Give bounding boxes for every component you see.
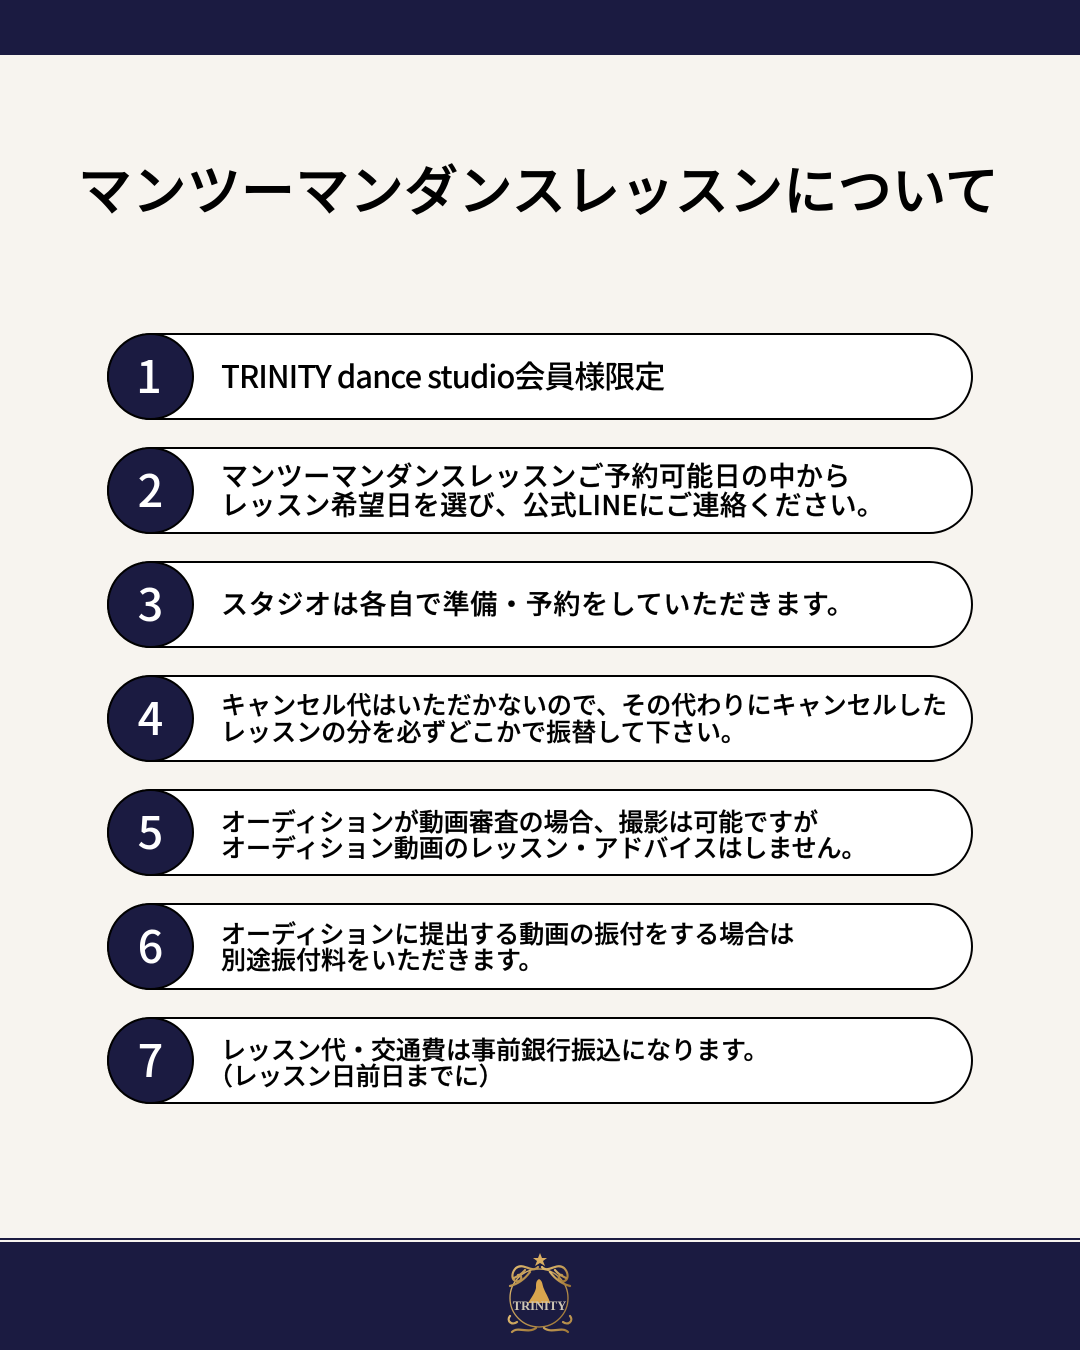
text 6 (221, 915, 794, 977)
item 6 (107, 903, 973, 990)
text 2: マンツーマンダンスレッスンご予約可能日の中から (221, 455, 851, 494)
text 7 (208, 1031, 769, 1093)
number 4 (107, 675, 194, 762)
item 2 (107, 447, 973, 534)
number 5: 5 (138, 797, 163, 862)
text 3: スタジオは各自で準備・予約をしていただきます。 (221, 583, 855, 622)
number 2 (107, 447, 194, 534)
text 6: オーディションに提出する動画の振付をする場合は (221, 915, 794, 951)
text 2 (221, 455, 884, 523)
logo (508, 1253, 572, 1334)
title: マンツーマンダンスレッスンについて (78, 147, 999, 226)
number 3 (107, 561, 194, 648)
text 4: キャンセル代はいただかないので、その代わりにキャンセルした (221, 686, 947, 722)
number 7 (107, 1017, 194, 1104)
top band (0, 0, 1080, 55)
text 7: （レッスン日前日までに） (208, 1057, 503, 1093)
text 4 (221, 686, 947, 749)
number 4: 4 (138, 683, 163, 748)
number 1 (107, 333, 194, 420)
text 5: オーディション動画のレッスン・アドバイスはしません。 (221, 829, 866, 865)
bottom band (0, 1238, 1080, 1350)
text 1: TRINITY dance studio会員様限定 (221, 352, 664, 397)
item 1 (107, 333, 973, 420)
number 2: 2 (138, 455, 163, 520)
number 6 (107, 903, 194, 990)
number 5 (107, 789, 194, 876)
logo: TRINITY (513, 1299, 566, 1313)
number 6: 6 (138, 911, 163, 976)
number 7: 7 (138, 1025, 163, 1090)
text 2: レッスン希望日を選び、公式LINEにご連絡ください。 (221, 484, 884, 523)
text 7: レッスン代・交通費は事前銀行振込になります。 (221, 1031, 769, 1067)
text 6: 別途振付料をいただきます。 (221, 941, 544, 977)
text 4: レッスンの分を必ずどこかで振替して下さい。 (221, 713, 746, 749)
item 3 (107, 561, 973, 648)
text 5 (221, 803, 866, 865)
item 5 (107, 789, 973, 876)
item 7 (107, 1017, 973, 1104)
item 4 (107, 675, 973, 762)
number 3: 3 (138, 569, 163, 634)
number 1: 1 (136, 341, 162, 406)
text 5: オーディションが動画審査の場合、撮影は可能ですが (221, 803, 818, 839)
